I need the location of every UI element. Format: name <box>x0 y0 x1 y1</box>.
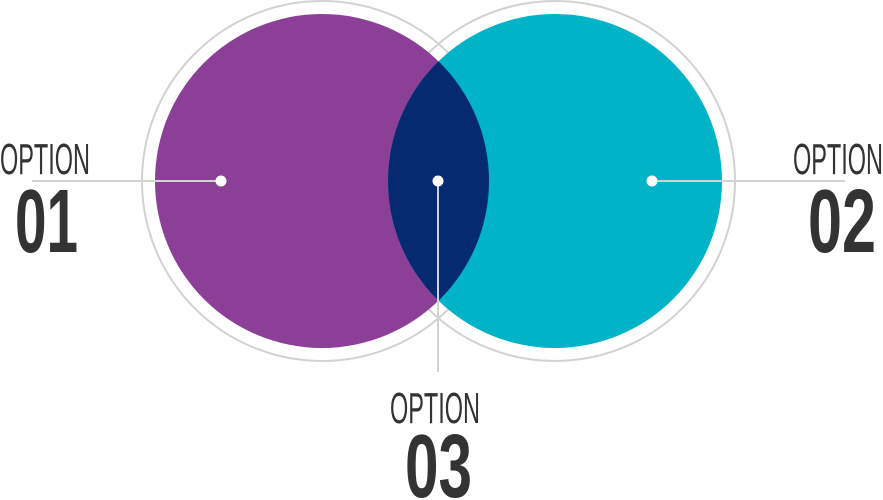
connector center <box>432 176 444 372</box>
outer ring left <box>142 1 502 361</box>
outer ring right <box>375 1 735 361</box>
connector left <box>32 176 226 186</box>
label: option 02 <box>793 135 883 272</box>
intersection: option 03 <box>388 62 489 300</box>
label: option 01: OPTION <box>0 135 90 184</box>
label: option 03 <box>390 384 480 500</box>
label: option 01 <box>0 135 90 272</box>
circle: option 02 <box>388 14 722 348</box>
label: option 03: OPTION <box>390 384 480 433</box>
label: option 01: 01 <box>15 172 78 272</box>
connector right <box>646 176 845 186</box>
circle: option 01 <box>155 14 489 348</box>
